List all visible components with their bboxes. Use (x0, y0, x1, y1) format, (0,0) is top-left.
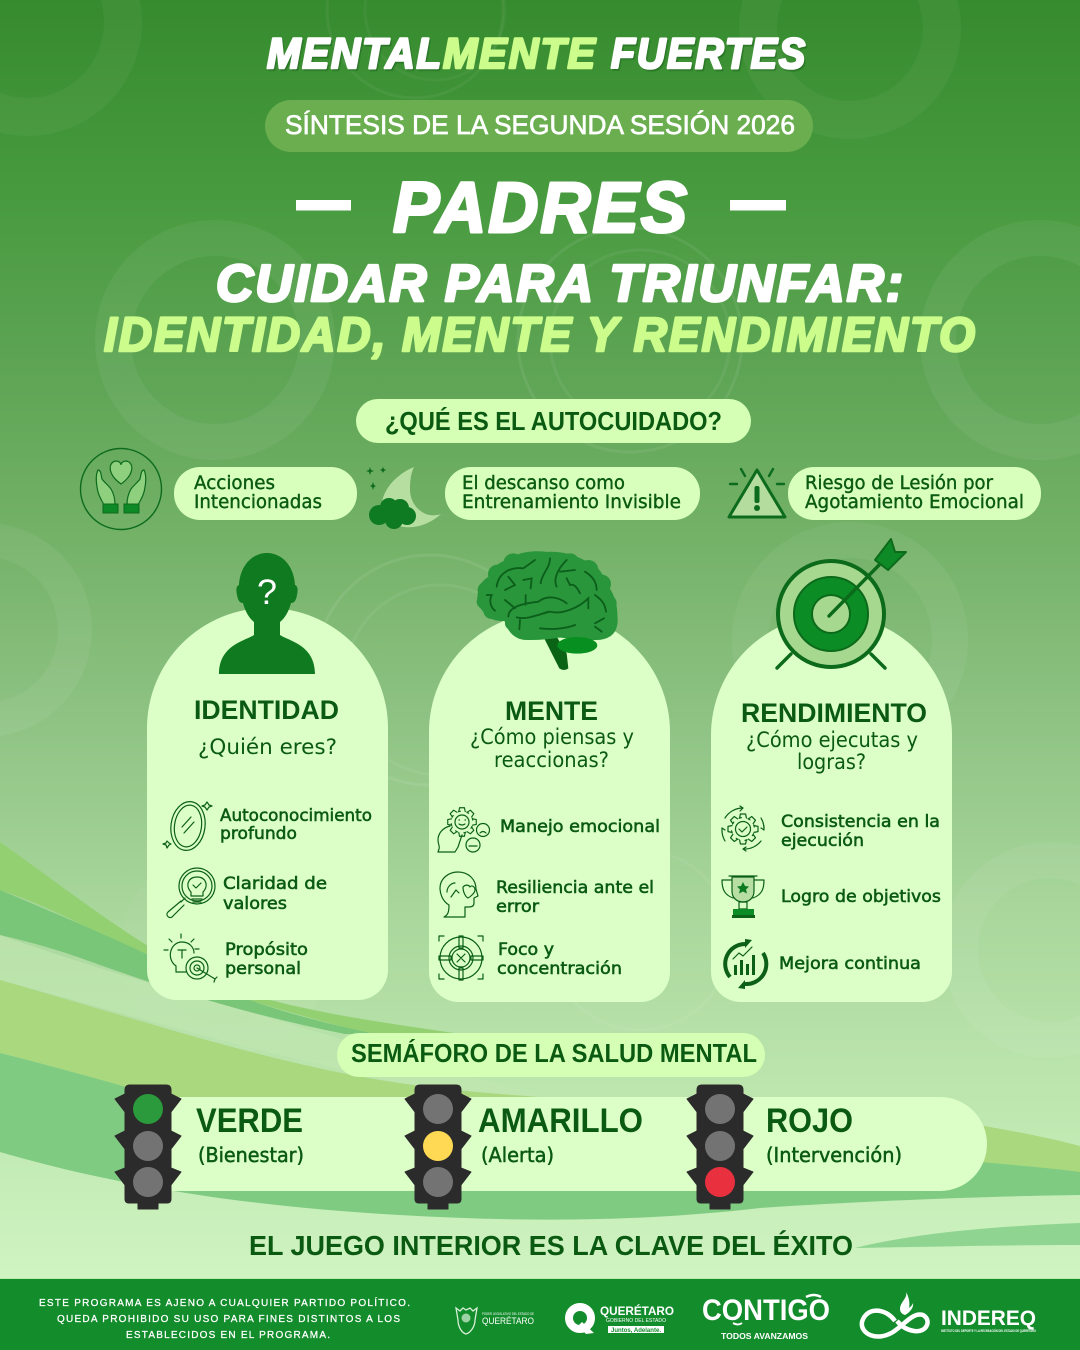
item: claridad de valores (167, 868, 327, 918)
item: claridad de valores: Claridad de (223, 874, 327, 894)
label: rojo: ROJO (766, 1102, 853, 1140)
label: verde: VERDE (196, 1102, 303, 1140)
pill: semaforo de la salud mental (337, 1033, 765, 1077)
pill: descanso: El descanso como (462, 472, 625, 494)
heading: Padres (296, 169, 786, 248)
card heading (470, 696, 634, 772)
item: proposito personal: personal (225, 959, 301, 979)
heading: Cuidar para triunfar: CUIDAR PARA TRIUNFAR: (216, 255, 905, 313)
item: consistencia (722, 806, 940, 851)
icon: target with arrow (777, 539, 906, 668)
pill: riesgo de lesion (788, 467, 1041, 520)
pill: semaforo de la salud mental: SEMÁFORO DE LA SALUD MENTAL (351, 1038, 757, 1068)
item: claridad de valores: valores (223, 894, 287, 914)
panel: identidad (147, 553, 388, 1000)
card heading: ¿Cómo piensas y (470, 725, 634, 749)
item: foco y concentracion: Foco y (498, 940, 554, 960)
item: consistencia: ejecución (781, 831, 864, 851)
label: verde (196, 1102, 304, 1167)
item: resiliencia: error (496, 897, 539, 917)
title: Mentalmente Fuertes: MENTAL (267, 30, 443, 78)
panel: mente (429, 552, 670, 1002)
pill: acciones intencionadas: Intencionadas (194, 491, 322, 513)
traffic light: rojo (687, 1085, 753, 1209)
item: foco y concentracion: concentración (497, 959, 622, 979)
item: resiliencia (440, 872, 654, 917)
title: Mentalmente Fuertes (267, 30, 808, 80)
pill: riesgo de lesion: Riesgo de Lesión por (805, 472, 993, 494)
card heading: ¿Quién eres? (198, 735, 337, 759)
traffic light: amarillo (405, 1085, 471, 1209)
label: amarillo: AMARILLO (478, 1102, 643, 1140)
pill: riesgo de lesion: Agotamiento Emocional (805, 491, 1024, 513)
disclaimer text: ESTABLECIDOS EN EL PROGRAMA. (126, 1330, 330, 1341)
item: manejo emocional: Manejo emocional (500, 817, 660, 837)
pill: descanso: Entrenamiento Invisible (462, 491, 681, 513)
logo: indereq: INDEREQ (941, 1307, 1036, 1330)
item: consistencia: Consistencia en la (781, 812, 940, 832)
logo: queretaro gobierno: GOBIERNO DEL ESTADO (606, 1318, 666, 1324)
item: foco y concentracion (439, 936, 622, 980)
icon: person with question mark (219, 553, 315, 674)
title: Mentalmente Fuertes: MENTE (443, 30, 597, 78)
label: amarillo: (Alerta) (481, 1143, 554, 1167)
logo: contigo: TODOS AVANZAMOS (721, 1331, 808, 1341)
session pill: SÍNTESIS DE LA SEGUNDA SESIÓN 2026 (285, 109, 795, 140)
label: amarillo (478, 1102, 643, 1167)
logo: indereq (862, 1292, 1036, 1337)
title: Mentalmente Fuertes: FUERTES (612, 32, 808, 80)
disclaimer text (39, 1296, 410, 1341)
card heading: reaccionas? (494, 748, 609, 772)
disclaimer text: ESTE PROGRAMA ES AJENO A CUALQUIER PARTIDO POLÍTICO. (39, 1296, 410, 1309)
icon: person with question mark: ? (257, 573, 277, 612)
traffic light: verde (115, 1085, 181, 1209)
label: rojo: (Intervención) (766, 1143, 902, 1167)
item: autoconocimiento: profundo (220, 824, 297, 844)
card heading: RENDIMIENTO (741, 698, 927, 728)
logo: queretaro gobierno (569, 1303, 674, 1334)
icon: brain (477, 552, 618, 670)
item: resiliencia: Resiliencia ante el (496, 878, 654, 898)
disclaimer text: QUEDA PROHIBIDO SU USO PARA FINES DISTINTOS A LOS (57, 1314, 400, 1325)
logo: queretaro gobierno: QUERÉTARO (600, 1303, 674, 1318)
heading: Cuidar para triunfar (104, 255, 977, 362)
pill: descanso (445, 467, 700, 520)
item: logro de objetivos: Logro de objetivos (781, 887, 941, 907)
footer band (0, 1278, 1080, 1350)
logo: indereq: INSTITUTO DEL DEPORTE Y LA RECREACIÓN DEL ESTADO DE QUERÉTARO (941, 1328, 1036, 1333)
closing statement: EL JUEGO INTERIOR ES LA CLAVE DEL ÉXITO (249, 1230, 853, 1261)
item: autoconocimiento: Autoconocimiento (220, 806, 372, 826)
card heading: MENTE (505, 696, 598, 726)
heading: Padres: PADRES (393, 169, 689, 248)
panel: traffic light strip (115, 1085, 987, 1209)
title: Mentalmente Fuertes: MENTAL (268, 32, 444, 80)
card heading: IDENTIDAD (194, 695, 339, 725)
card heading (741, 698, 927, 774)
pill: acciones intencionadas: Acciones (194, 472, 275, 494)
card heading (194, 695, 339, 759)
label: verde: (Bienestar) (198, 1143, 304, 1167)
title: Mentalmente Fuertes: FUERTES (611, 30, 807, 78)
item: proposito personal: Propósito (225, 940, 308, 960)
item: mejora continua (725, 939, 921, 989)
item: logro de objetivos (722, 876, 941, 918)
logo: legislatura queretaro (456, 1308, 535, 1334)
item: autoconocimiento (163, 799, 372, 853)
logo: legislatura queretaro: PODER LEGISLATIVO DEL ESTADO DE (482, 1312, 535, 1316)
session pill (265, 100, 813, 152)
pill: que es el autocuidado: ¿QUÉ ES EL AUTOCUIDADO? (385, 406, 722, 436)
icon: moon and cloud (366, 467, 441, 529)
pill: que es el autocuidado (356, 399, 751, 443)
item: manejo emocional (438, 808, 660, 852)
label: rojo (766, 1102, 902, 1167)
icon: warning triangle (729, 469, 785, 517)
heading: Cuidar para triunfar: IDENTIDAD, MENTE Y RENDIMIENTO (104, 309, 977, 362)
pill: acciones intencionadas (174, 467, 357, 520)
item: mejora continua: Mejora continua (779, 954, 921, 974)
card heading: logras? (797, 750, 866, 774)
logo: contigo (702, 1294, 830, 1341)
icon: caring hands (80, 448, 162, 530)
logo: contigo: CONTIGO (702, 1294, 830, 1327)
card heading: ¿Cómo ejecutas y (746, 728, 918, 752)
logo: queretaro gobierno: Juntos, Adelante. (611, 1328, 661, 1334)
logo: legislatura queretaro: QUERÉTARO (482, 1316, 534, 1327)
item: proposito personal (164, 934, 308, 982)
panel: rendimiento (711, 539, 952, 1002)
